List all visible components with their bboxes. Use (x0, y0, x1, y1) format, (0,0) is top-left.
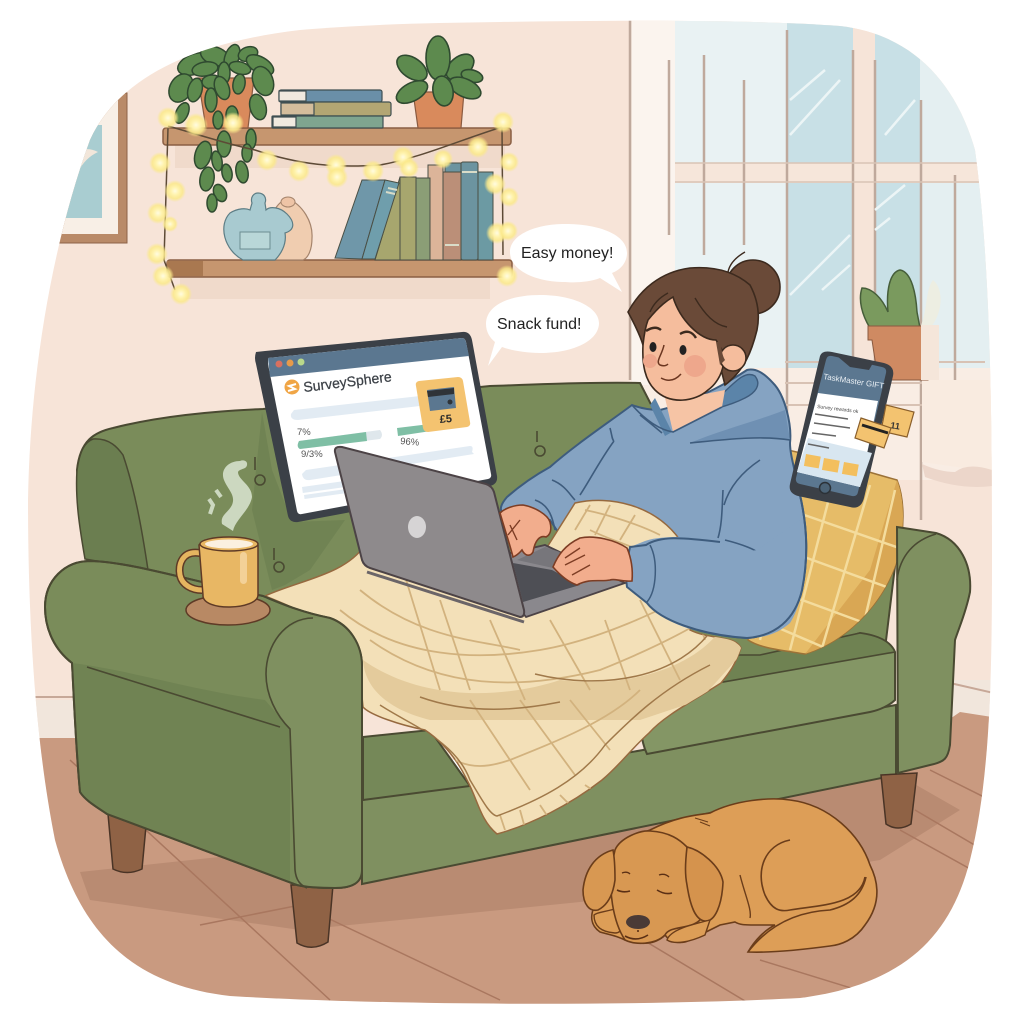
icon: potted plant right (392, 36, 484, 128)
dog sleeping (583, 799, 877, 952)
phone list text: Survey rewards ok (817, 404, 859, 415)
percent labels: 7% (297, 427, 311, 438)
logo (284, 380, 300, 394)
mug with steam (180, 460, 270, 625)
fairy lights (146, 107, 519, 305)
floating gift cards: 11 (890, 420, 901, 432)
speech bubble snack fund: Snack fund! (497, 316, 582, 333)
vases (224, 193, 312, 260)
icon: hanging plant and pot (164, 42, 278, 212)
person hands (500, 505, 632, 585)
person hoodie (501, 370, 806, 638)
picture frame (59, 92, 128, 244)
gift card badge (416, 377, 470, 432)
speech bubble easy money (510, 224, 627, 292)
icon: window plant (860, 270, 941, 380)
sofa right arm (897, 527, 970, 773)
baseboard (36, 682, 990, 712)
sofa back (76, 382, 896, 654)
hoodie sleeve over blanket (626, 495, 806, 638)
tablet title: SurveySphere (302, 368, 393, 395)
speech bubble snack fund (486, 295, 599, 366)
percent labels: 9/3% (301, 449, 323, 460)
speech bubble easy money: Easy money! (521, 245, 613, 262)
person head (628, 252, 780, 400)
laptop (335, 447, 625, 622)
cushion pillow (748, 445, 905, 655)
window with curtains (628, 20, 992, 520)
phone title: TaskMaster GIFT (823, 372, 885, 391)
floor (40, 712, 989, 1004)
gift card badge: £5 (439, 413, 452, 426)
stacked books (272, 90, 391, 128)
tablet SurveySphere (255, 332, 497, 522)
floating gift cards (855, 405, 914, 448)
sofa left arm (45, 561, 362, 888)
sofa legs (108, 773, 917, 947)
shelf top (163, 128, 511, 168)
percent labels: 96% (400, 436, 420, 449)
percent labels (298, 428, 419, 457)
sofa seat and base (362, 633, 896, 884)
blanket (265, 500, 745, 834)
hood inner and neck (632, 374, 758, 436)
phone (790, 352, 914, 508)
upright books (335, 162, 493, 260)
shelf bottom (167, 260, 512, 299)
wall (0, 0, 1024, 760)
